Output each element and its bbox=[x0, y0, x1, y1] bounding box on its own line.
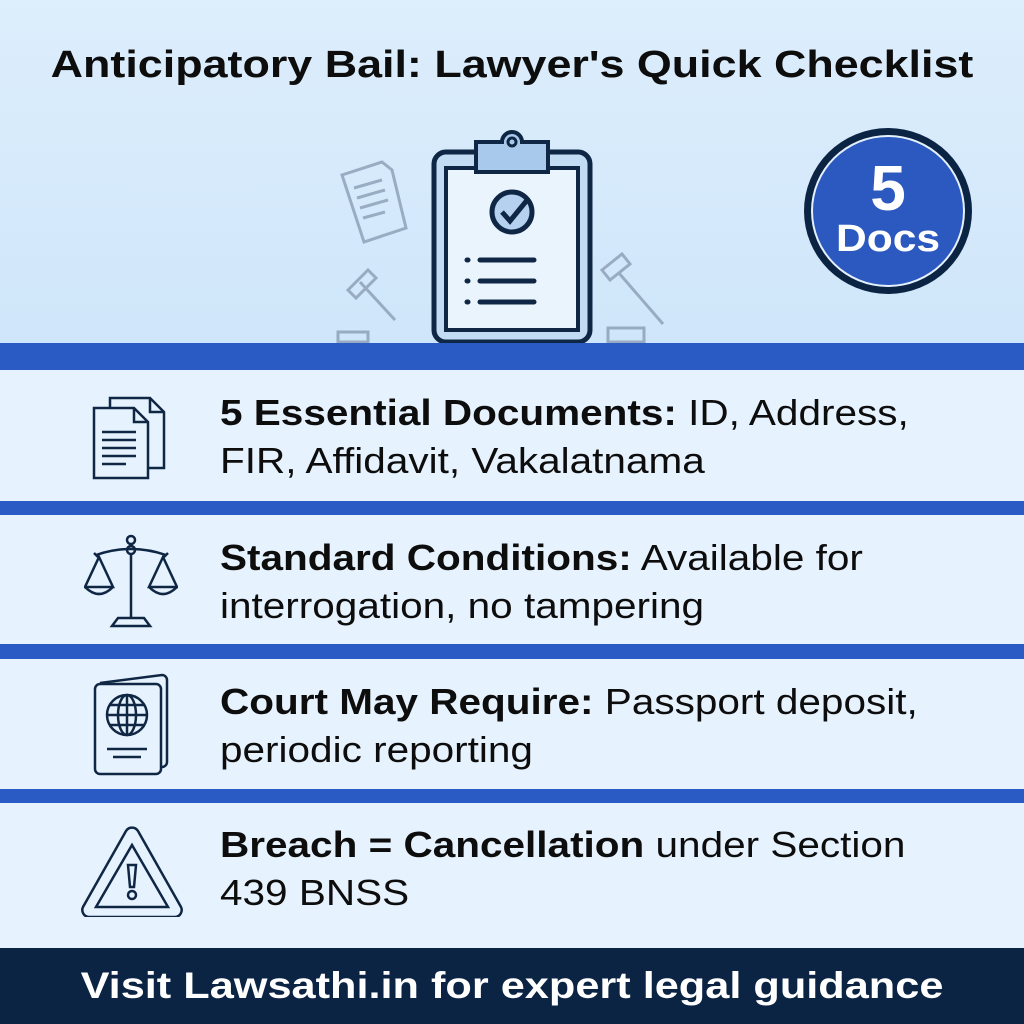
header background bbox=[0, 0, 1024, 345]
text: court may require bbox=[220, 681, 918, 770]
text: breach: 439 BNSS bbox=[220, 872, 409, 913]
text: essential documents: FIR, Affidavit, Vakalatnama bbox=[220, 440, 705, 481]
panel: standard conditions bbox=[0, 515, 1024, 644]
icon: scales bbox=[84, 534, 178, 628]
icon: documents bbox=[92, 396, 166, 480]
text: court may require: Court May Require: Passport deposit, bbox=[220, 681, 918, 722]
badge: 5 Docs: 5 bbox=[870, 152, 906, 224]
panel: court may require bbox=[0, 659, 1024, 789]
text: essential documents: 5 Essential Documents: ID, Address, bbox=[220, 392, 909, 433]
text: breach bbox=[220, 824, 905, 913]
illustration: clipboard with documents and gavels bbox=[336, 130, 664, 343]
text: essential documents bbox=[220, 392, 909, 481]
badge: 5 Docs bbox=[804, 128, 972, 294]
icon: warning triangle bbox=[81, 826, 183, 917]
text: breach: Breach = Cancellation under Section bbox=[220, 824, 905, 865]
footer: Visit Lawsathi.in for expert legal guidance bbox=[81, 965, 943, 1006]
footer bbox=[0, 948, 1024, 1024]
text: standard conditions: Standard Conditions: Available for bbox=[220, 537, 863, 578]
text: court may require: periodic reporting bbox=[220, 729, 533, 770]
panel: documents bbox=[0, 370, 1024, 501]
text: standard conditions: interrogation, no tampering bbox=[220, 585, 704, 626]
text: standard conditions bbox=[220, 537, 863, 626]
badge: 5 Docs: Docs bbox=[836, 218, 940, 260]
panel: breach bbox=[0, 803, 1024, 948]
title: Anticipatory Bail: Lawyer's Quick Checklist bbox=[51, 44, 973, 86]
icon: passport bbox=[94, 674, 168, 776]
